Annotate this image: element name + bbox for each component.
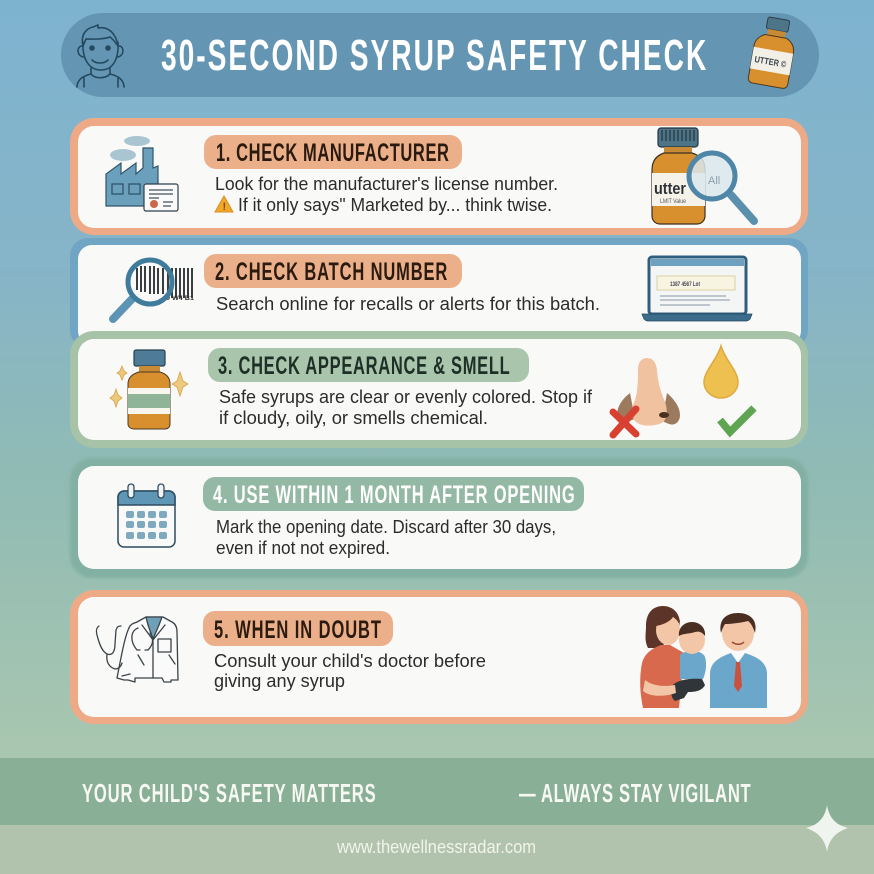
icon: oil drop [704,346,738,398]
step 3 text [219,386,593,428]
icon: syrup bottle: UTTER © [754,54,787,70]
footer banner [0,758,874,825]
icon: stethoscope and coat [96,617,178,682]
footer message right: — ALWAYS STAY VIGILANT [519,778,751,808]
panel: step 2 batch number [70,238,808,348]
step 1 heading: 1. CHECK MANUFACTURER [216,140,449,167]
step 4 text: Mark the opening date. Discard after 30 days, [216,516,556,537]
icon: bottle with magnifier [652,128,754,224]
step 3 text: Safe syrups are clear or evenly colored. Stop if [219,386,593,407]
icon: magnifier on barcode: 9 W4 B1 [166,296,195,302]
panel: step 3 appearance and smell [70,331,808,448]
icon: boy [77,25,124,87]
step 1 text: If it only says" Marketed by... think twise. [238,194,552,215]
icon: calendar [118,484,175,547]
step 5 text: Consult your child's doctor before [214,650,486,671]
icon: nose [617,358,680,426]
icon: magnifier on barcode [113,260,195,319]
step 4 text: even if not not expired. [216,537,390,558]
icon: bottle with sparkles [110,350,188,429]
step 4 heading: 4. USE WITHIN 1 MONTH AFTER OPENING [213,482,575,509]
icon: red cross [613,409,636,435]
step 4 text [216,516,556,558]
step 2 text: Search online for recalls or alerts for this batch. [216,293,600,314]
title: 30-SECOND SYRUP SAFETY CHECK [161,31,707,80]
step 5 text: giving any syrup [214,670,345,691]
icon: green check [720,408,754,432]
website strip [0,825,874,874]
step 5 heading [203,611,393,646]
header banner [61,13,819,97]
icon: bottle with magnifier: utter [654,179,686,198]
icon: parent child and doctor [640,606,767,708]
icon: factory with license [106,136,178,211]
step 3 heading: 3. CHECK APPEARANCE & SMELL [218,353,510,380]
panel: step 1 manufacturer [70,118,808,235]
icon: syrup bottle [748,15,799,89]
website strip: www.thewellnessradar.com [336,837,536,857]
icon: laptop search [642,257,752,321]
footer message left: YOUR CHILD'S SAFETY MATTERS [82,778,376,808]
step 2 heading: 2. CHECK BATCH NUMBER [215,259,447,286]
icon: sparkle [806,805,848,852]
icon: bottle with magnifier: All [708,175,720,187]
step 5 text [214,650,486,691]
step 1 text: Look for the manufacturer's license number. [215,173,558,194]
icon: bottle with magnifier: LMIT Value [660,199,687,205]
step 5 heading: 5. WHEN IN DOUBT [214,617,381,644]
panel: step 5 when in doubt [70,590,808,724]
step 1 text [215,173,558,215]
step 1 text: ! [222,201,226,213]
panel: step 4 use within a month [70,458,808,578]
step 3 text: if cloudy, oily, or smells chemical. [219,407,488,428]
icon: laptop search: 1387 4567 Lot [670,282,700,288]
